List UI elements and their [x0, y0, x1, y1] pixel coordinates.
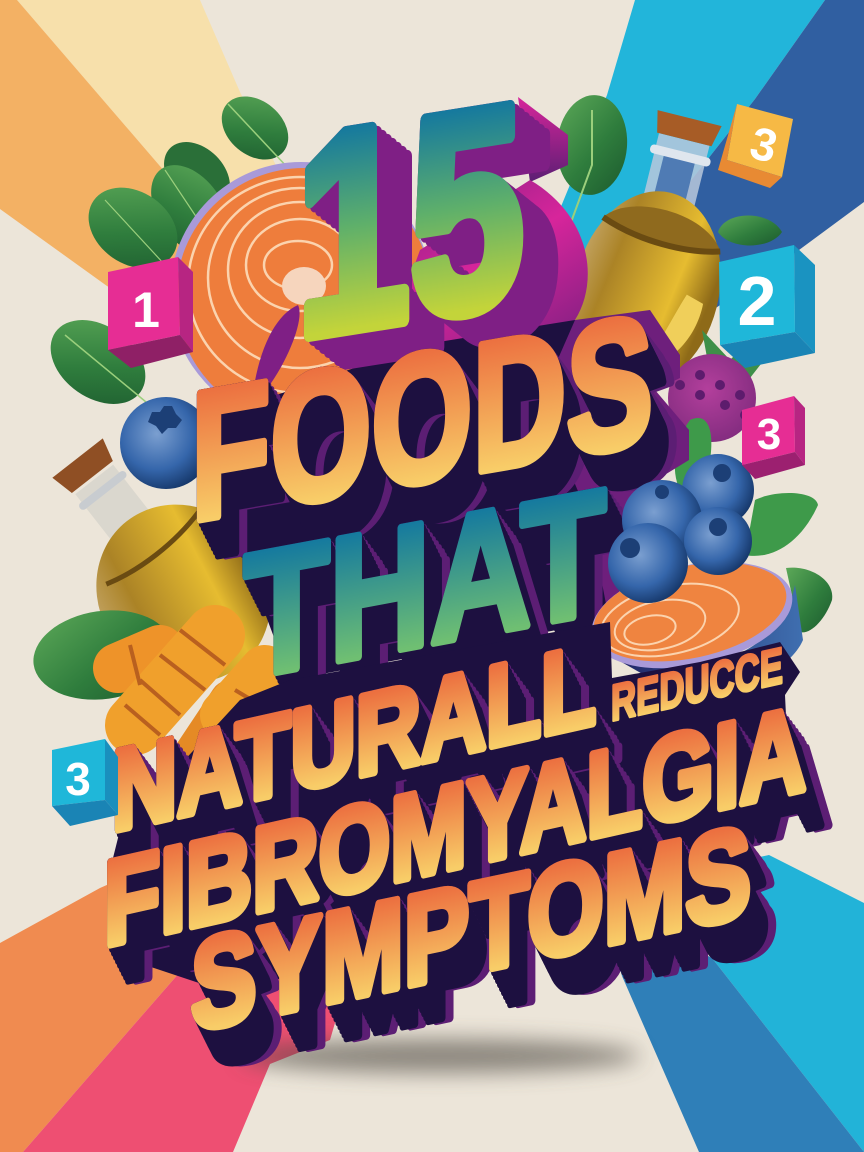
turmeric roots [118, 630, 265, 760]
salmon steak: lower right [582, 545, 803, 695]
cube: blue 3 [52, 739, 118, 826]
cube: pink 3: 3 [757, 410, 781, 459]
blueberry: left [120, 397, 212, 489]
salmon steak: large [170, 162, 432, 424]
heading: NATURALL: NATURALL [112, 621, 596, 856]
heading: FOODS: FOODS [191, 276, 653, 561]
blueberries: right cluster [608, 454, 754, 603]
heading: REDUCCE: REDUCCE [611, 636, 783, 732]
ground shadow [240, 1039, 640, 1073]
cube: pink 1: 1 [132, 282, 160, 338]
ray: pale yellow top left [17, 0, 430, 480]
leaves: top left cluster [73, 129, 245, 285]
leaf: top right [553, 92, 631, 225]
ray: orange bottom left [0, 800, 300, 1152]
magenta blob behind 15 [380, 180, 588, 400]
magenta extrusion top of 15 [518, 97, 568, 182]
ray: pink bottom left [23, 800, 400, 1152]
leaf: left of cube 1 [35, 303, 161, 421]
heading: THAT: THAT [244, 451, 606, 716]
cube: blue 2 [719, 245, 815, 368]
leaf: lower left [28, 602, 178, 708]
cube: pink 1 [108, 257, 193, 368]
leaf: small right [718, 216, 782, 246]
bottle: left [11, 406, 306, 718]
purple sweep right of foods [540, 310, 689, 625]
ray: cyan top right [440, 0, 825, 500]
cube: blue 3: 3 [65, 753, 91, 805]
cube: yellow 3 [718, 104, 793, 188]
bottle: top right [553, 101, 759, 404]
leaf: top centre [209, 84, 301, 172]
cube: pink 3 [742, 396, 805, 479]
cube: yellow 3: 3 [745, 116, 783, 173]
leaves: right cluster [675, 418, 832, 632]
heading: 15: 15 [296, 43, 524, 398]
raspberry with leaves [668, 330, 768, 442]
navy block behind foods and that [205, 320, 610, 680]
ray: cyan bottom right [650, 855, 864, 1152]
cube: blue 2: 2 [738, 262, 776, 340]
ray: orange top left [0, 0, 430, 480]
ray: blue bottom right [600, 900, 864, 1152]
navy block behind lower words [110, 622, 800, 990]
ray: navy blue top right [440, 0, 864, 500]
